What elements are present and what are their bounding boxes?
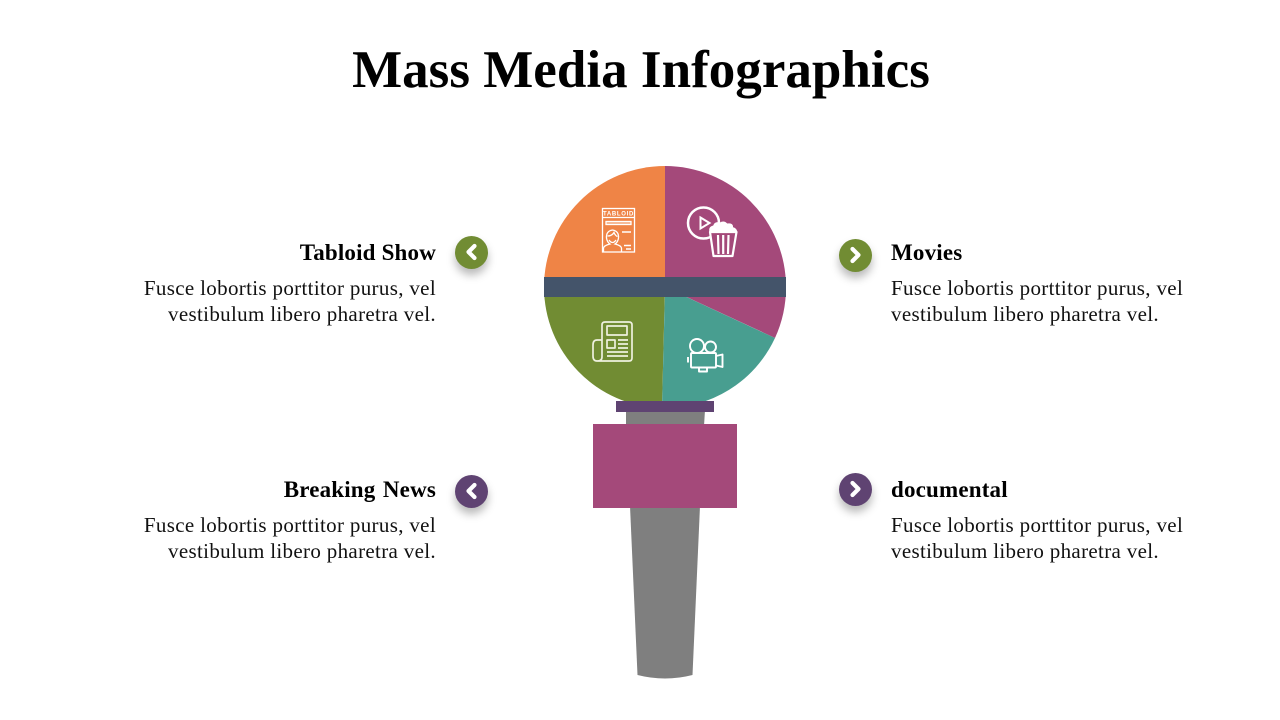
text block: Tabloid Show: vestibulum libero pharetra vel. xyxy=(168,302,436,326)
text block: Tabloid Show xyxy=(144,240,436,326)
microphone collar xyxy=(593,424,737,508)
microphone neck ring xyxy=(616,401,714,412)
text block: Movies: Fusce lobortis porttitor purus, vel xyxy=(891,276,1183,300)
microphone head pie xyxy=(544,166,786,408)
text block: documental xyxy=(891,477,1183,563)
icon: right arrow button purple xyxy=(839,473,872,506)
text block: Breaking News xyxy=(144,477,436,563)
icon: film camera xyxy=(688,339,722,372)
icon: left arrow button purple xyxy=(455,475,488,508)
text block: Movies: Movies xyxy=(891,240,962,265)
text block: documental: vestibulum libero pharetra vel. xyxy=(891,539,1159,563)
icon: tabloid newspaper: TABLOID xyxy=(603,212,634,218)
microphone handle xyxy=(626,410,705,678)
icon: right arrow button green xyxy=(839,239,872,272)
icon: left arrow button green xyxy=(455,236,488,269)
text block: Movies xyxy=(891,240,1183,326)
icon: play button and popcorn xyxy=(688,208,737,256)
text block: documental: documental xyxy=(891,477,1008,502)
text block: Breaking News: Breaking News xyxy=(284,477,436,502)
title: Mass Media Infographics xyxy=(352,41,930,99)
icon: tabloid newspaper xyxy=(602,208,634,252)
text block: Movies: vestibulum libero pharetra vel. xyxy=(891,302,1159,326)
microphone band xyxy=(544,277,786,297)
icon: newspaper xyxy=(593,322,632,361)
text block: Breaking News: vestibulum libero pharetra vel. xyxy=(168,539,436,563)
text block: Tabloid Show: Tabloid Show xyxy=(300,240,436,265)
text block: Tabloid Show: Fusce lobortis porttitor purus, vel xyxy=(144,276,436,300)
text block: Breaking News: Fusce lobortis porttitor purus, vel xyxy=(144,513,436,537)
text block: documental: Fusce lobortis porttitor purus, vel xyxy=(891,513,1183,537)
